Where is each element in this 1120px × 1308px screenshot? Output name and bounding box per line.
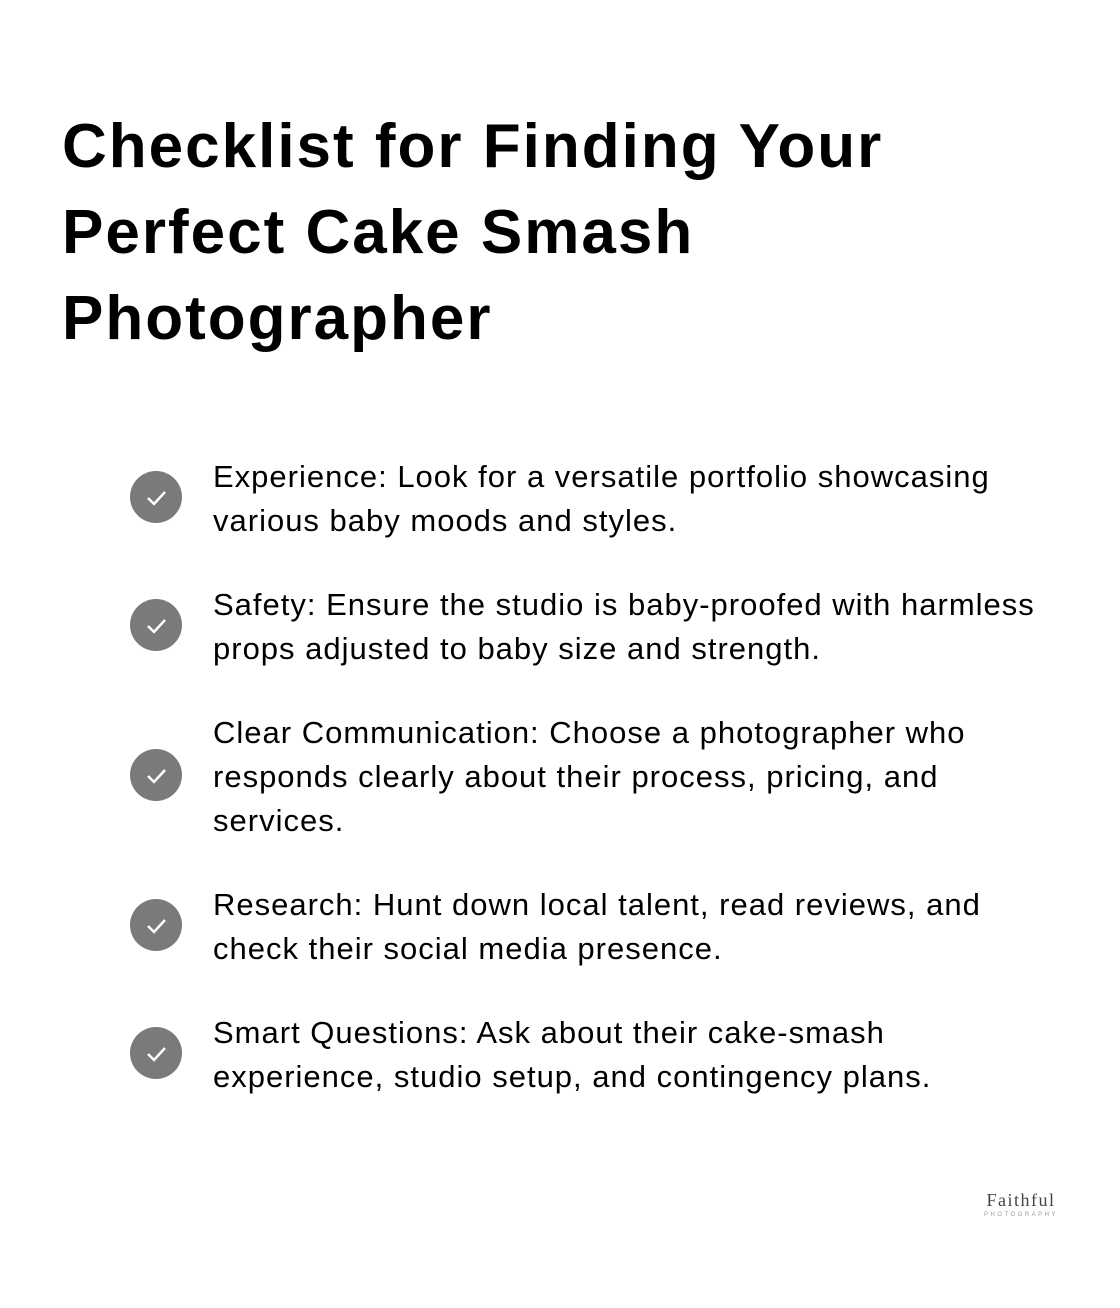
title: Photographer bbox=[62, 284, 492, 353]
text: experience bbox=[213, 459, 990, 538]
text: communication: services. bbox=[213, 803, 344, 838]
icon: check bbox=[130, 899, 182, 951]
text: communication: responds clearly about their process, pricing, and bbox=[213, 759, 938, 794]
item: safety bbox=[130, 587, 1035, 666]
text: communication: Clear Communication: Choose a photographer who bbox=[213, 715, 966, 750]
text: questions: Smart Questions: Ask about their cake-smash bbox=[213, 1015, 885, 1050]
item: experience bbox=[130, 459, 990, 538]
title bbox=[62, 112, 883, 353]
icon: check bbox=[130, 1027, 182, 1079]
title: Checklist for Finding Your bbox=[62, 112, 883, 181]
icon: check bbox=[130, 599, 182, 651]
icon: check bbox=[130, 749, 182, 801]
text: experience: Experience: Look for a versatile portfolio showcasing bbox=[213, 459, 990, 494]
text: safety bbox=[213, 587, 1035, 666]
title: Perfect Cake Smash bbox=[62, 198, 694, 267]
logo: Faithful bbox=[986, 1190, 1056, 1210]
text: research: check their social media presence. bbox=[213, 931, 723, 966]
text: research bbox=[213, 887, 981, 966]
text: safety: props adjusted to baby size and strength. bbox=[213, 631, 821, 666]
text: research: Research: Hunt down local talent, read reviews, and bbox=[213, 887, 981, 922]
text: communication bbox=[213, 715, 966, 838]
text: experience: various baby moods and styles. bbox=[213, 503, 677, 538]
item: communication bbox=[130, 715, 966, 838]
icon: check bbox=[130, 471, 182, 523]
text: safety: Safety: Ensure the studio is baby-proofed with harmless bbox=[213, 587, 1035, 622]
text: questions bbox=[213, 1015, 931, 1094]
item: research bbox=[130, 887, 981, 966]
logo bbox=[984, 1190, 1058, 1218]
logo: PHOTOGRAPHY bbox=[984, 1212, 1058, 1218]
text: questions: experience, studio setup, and contingency plans. bbox=[213, 1059, 931, 1094]
item: questions bbox=[130, 1015, 931, 1094]
